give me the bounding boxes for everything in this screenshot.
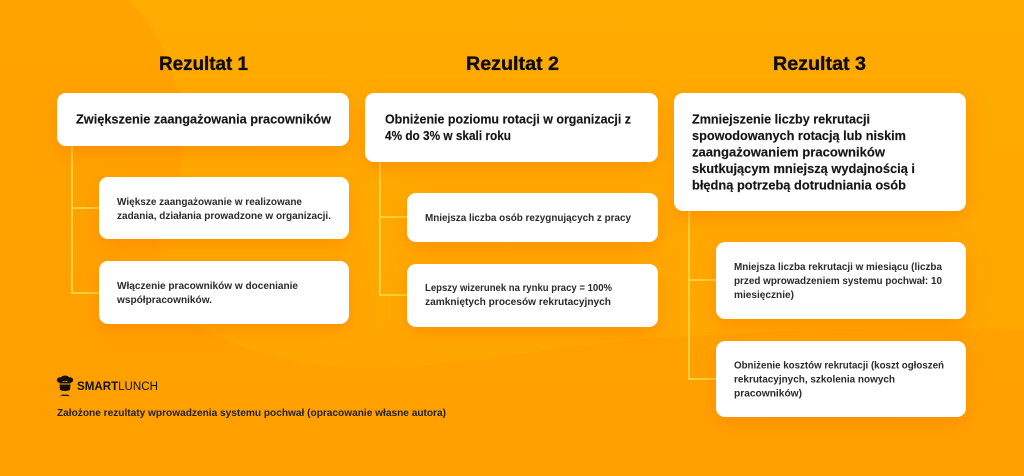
panel: result 3 main card: błędną potrzebą dotrudniania osób [692, 178, 906, 192]
panel: result 3 sub card 1: przed wprowadzeniem systemu pochwał: 10 [734, 276, 942, 287]
panel: result 2 main card: Obniżenie poziomu rotacji w organizacji z [385, 112, 631, 126]
panel: result 3 sub card 2: rekrutacyjnych, szkolenia nowych [734, 374, 895, 386]
panel: result 1 sub card 2: Włączenie pracowników w docenianie [117, 281, 299, 292]
panel: result 2 sub card 1: Mniejsza liczba osób rezygnujących z pracy [425, 213, 631, 224]
panel: result 1 sub card 2: współpracowników. [116, 295, 212, 306]
caption: Założone rezultaty wprowadzenia systemu pochwał (opracowanie własne autora) [57, 408, 446, 419]
panel: result 3 main card: zaangażowaniem pracowników [692, 144, 885, 160]
panel: result 1 sub card 1: Większe zaangażowanie w realizowane [117, 197, 303, 208]
panel: result 2 sub card 2: zamkniętych procesów rekrutacyjnych [425, 297, 611, 308]
connector lines: result 3 [689, 211, 716, 379]
connector lines: result 1 [72, 146, 99, 293]
panel: result 3 main card: spowodowanych rotacją lub niskim [692, 128, 906, 143]
panel: result 2 sub card 1 [407, 193, 658, 242]
panel: result 3 sub card 2: Obniżenie kosztów rekrutacji (koszt ogłoszeń [734, 360, 944, 372]
heading: Rezultat 3: Rezultat 3 [773, 53, 866, 75]
panel: result 3 sub card 1: Mniejsza liczba rekrutacji w miesiącu (liczba [734, 262, 942, 273]
heading: Rezultat 1: Rezultat 1 [159, 53, 248, 75]
panel: result 1 sub card 2 [99, 261, 349, 324]
panel: result 3 main card [674, 93, 966, 211]
panel: result 1 sub card 1 [99, 177, 349, 239]
panel: result 3 sub card 1: miesięcznie) [734, 290, 794, 301]
panel: result 3 sub card 1 [716, 242, 966, 319]
panel: result 1 sub card 1: zadania, działania prowadzone w organizacji. [117, 211, 331, 222]
logo text: SMARTLUNCH [77, 381, 158, 393]
panel: result 1 main card [57, 93, 349, 146]
panel: result 3 main card: skutkującym mniejszą wydajnością i [692, 161, 915, 176]
panel: result 2 sub card 2 [407, 264, 658, 327]
heading: Rezultat 2: Rezultat 2 [466, 53, 559, 75]
panel: result 1 main card: Zwiększenie zaangażowania pracowników [76, 112, 331, 126]
panel: result 3 sub card 2: pracowników) [734, 388, 802, 400]
panel: result 2 main card: 4% do 3% w skali roku [385, 128, 511, 143]
panel: result 3 sub card 2 [716, 341, 966, 417]
connector lines: result 2 [380, 162, 407, 295]
panel: result 3 main card: Zmniejszenie liczby rekrutacji [692, 112, 870, 126]
panel: result 2 sub card 2: Lepszy wizerunek na rynku pracy = 100% [425, 283, 612, 294]
icon: chef hat with moustache [57, 376, 73, 396]
panel: result 2 main card [365, 93, 658, 162]
